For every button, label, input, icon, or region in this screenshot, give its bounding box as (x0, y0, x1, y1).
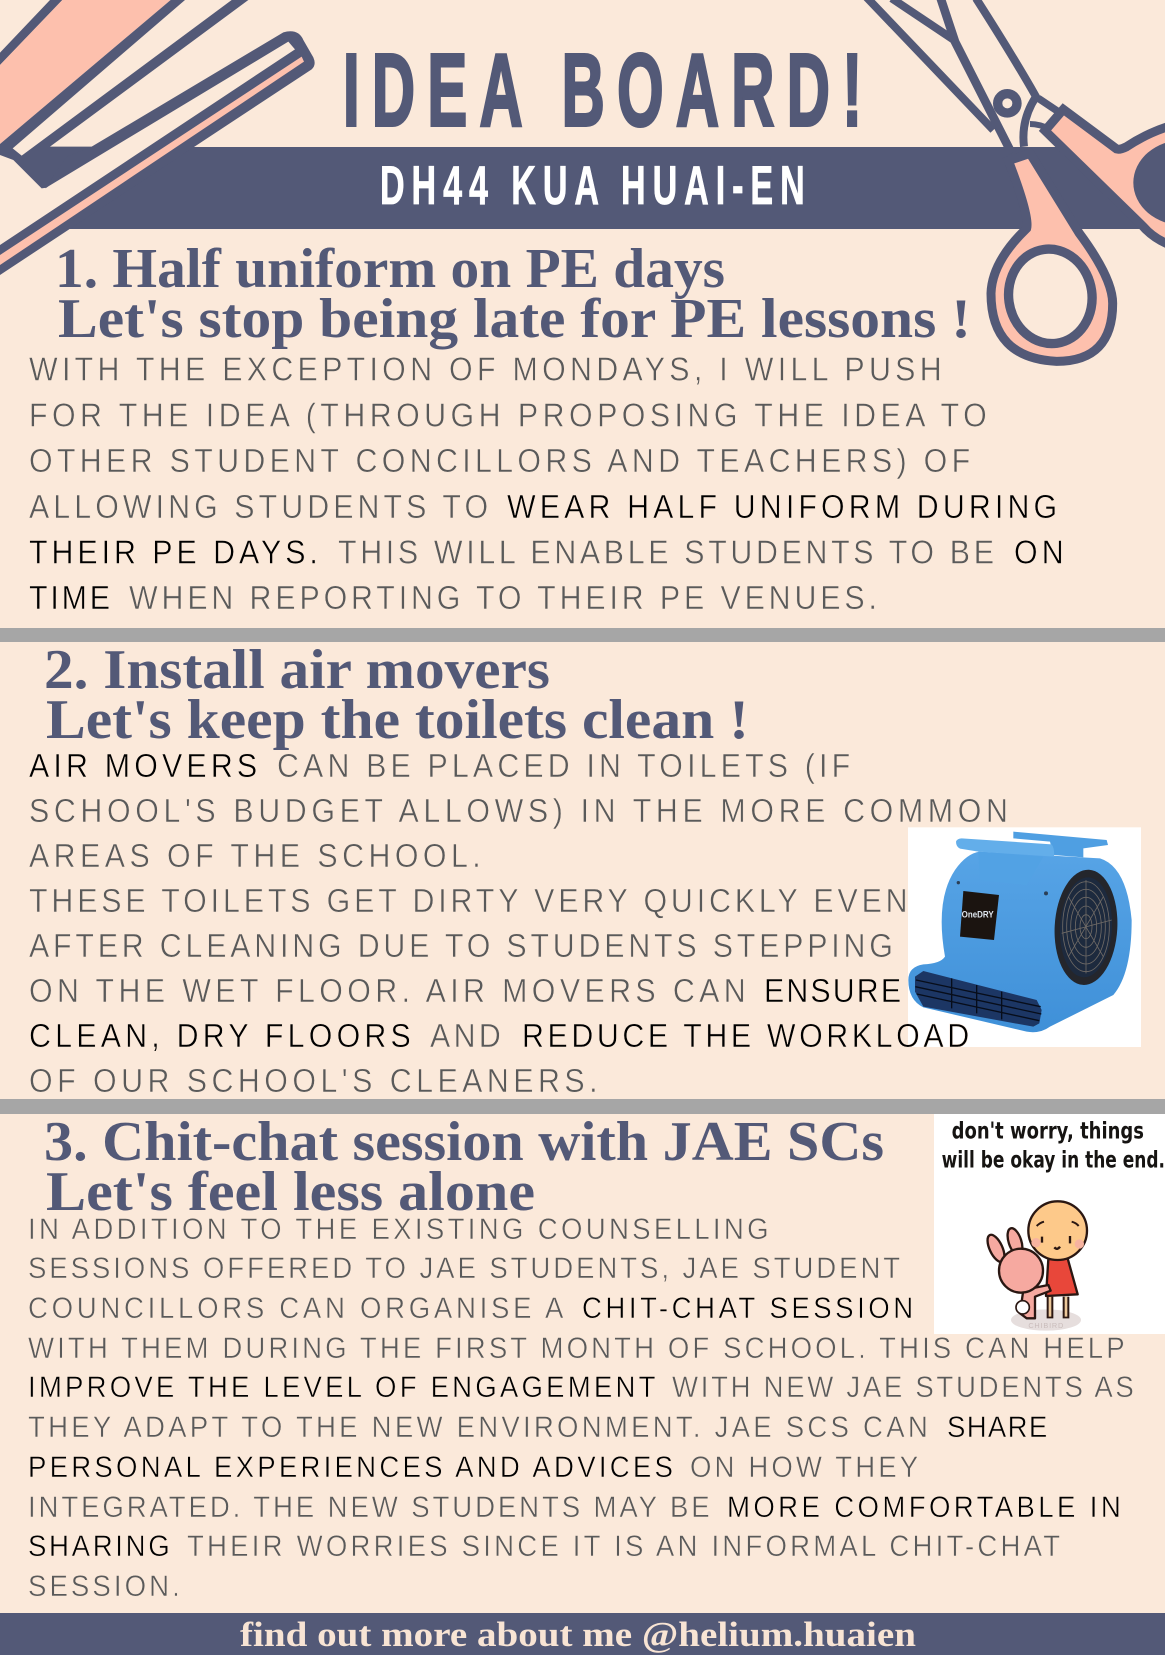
text block: idea 3 body: SESSION. (28, 1570, 180, 1603)
heading: idea 2 (44, 639, 749, 751)
text block: idea 3 body: THEY ADAPT TO THE NEW ENVIRONMENT. JAE SCS CAN (28, 1411, 928, 1444)
text block: idea 2 body: CLEAN, DRY FLOORS (29, 1017, 411, 1054)
divider bar 1 (0, 628, 1165, 642)
heading: idea 3 (44, 1111, 884, 1223)
text block: idea 1 body: WHEN REPORTING TO THEIR PE VENUES. (129, 579, 877, 616)
text block: idea 3 body: SHARING (28, 1530, 170, 1563)
text block: idea 3 body: THEIR WORRIES SINCE IT IS AN INFORMAL CHIT-CHAT (187, 1530, 1060, 1563)
text block: idea 2 body: SCHOOL'S BUDGET ALLOWS) IN THE MORE COMMON (29, 792, 1008, 829)
text block: idea 3 body: IMPROVE THE LEVEL OF ENGAGEMENT (28, 1371, 655, 1404)
text block: idea 3 body: WITH THEM DURING THE FIRST MONTH OF SCHOOL. THIS CAN HELP (28, 1332, 1125, 1365)
image: comic reassurance (934, 1114, 1165, 1334)
text block: idea 1 body: THIS WILL ENABLE STUDENTS TO BE (338, 533, 994, 571)
text block: idea 3 body: IN ADDITION TO THE EXISTING COUNSELLING (28, 1213, 769, 1246)
icon: scissors (866, 0, 1165, 361)
panel: idea 1 (29, 238, 1064, 616)
heading: idea 2: Let's keep the toilets clean ! (46, 689, 749, 751)
subtitle: DH44 KUA HUAI-EN (380, 155, 805, 216)
text block: idea 1 body: OTHER STUDENT CONCILLORS AND TEACHERS) OF (29, 442, 970, 479)
text block: idea 3 body: INTEGRATED. THE NEW STUDENTS MAY BE (28, 1491, 710, 1524)
text block: idea 3 body (28, 1213, 1134, 1603)
text block: idea 2 body: AFTER CLEANING DUE TO STUDENTS STEPPING (29, 927, 893, 964)
image: comic reassurance: CHIBIRD (1028, 1321, 1063, 1330)
text block: idea 2 body: AIR MOVERS (29, 747, 257, 784)
text block: idea 1 body: WEAR HALF UNIFORM DURING (507, 488, 1057, 525)
text block: idea 3 body: MORE COMFORTABLE IN (727, 1491, 1121, 1524)
heading: idea 1 (55, 238, 971, 350)
title: IDEA BOARD! (343, 33, 862, 148)
divider bar 2 (0, 1099, 1165, 1114)
footer (0, 1613, 1165, 1655)
text block: idea 2 body: CAN BE PLACED IN TOILETS (IF (277, 747, 850, 784)
text block: idea 3 body: SHARE (947, 1411, 1047, 1444)
text block: idea 1 body: FOR THE IDEA (THROUGH PROPOSING THE IDEA TO (29, 396, 987, 434)
heading: idea 3: Let's feel less alone (46, 1161, 535, 1223)
heading: idea 1: Let's stop being late for PE lessons ! (58, 288, 971, 350)
heading: idea 1: 1. Half uniform on PE days (55, 238, 725, 300)
text block: idea 2 body: REDUCE THE WORKLOAD (522, 1017, 969, 1054)
image: air mover fan (908, 827, 1141, 1047)
text block: idea 3 body: ON HOW THEY (690, 1451, 918, 1484)
text block: idea 3 body: CHIT-CHAT SESSION (582, 1292, 913, 1325)
text block: idea 2 body: THESE TOILETS GET DIRTY VERY QUICKLY EVEN (29, 882, 908, 919)
panel: idea 3 (28, 1111, 1165, 1603)
text block: idea 3 body: PERSONAL EXPERIENCES AND ADVICES (28, 1451, 673, 1484)
text block: idea 1 body: ALLOWING STUDENTS TO (29, 488, 488, 525)
image: air mover fan: OneDRY (962, 909, 994, 919)
text block: idea 2 body: ON THE WET FLOOR. AIR MOVERS CAN (29, 972, 746, 1009)
text block: idea 3 body: SESSIONS OFFERED TO JAE STUDENTS, JAE STUDENT (28, 1252, 900, 1285)
text block: idea 1 body: ON (1014, 533, 1064, 571)
header band (68, 147, 1165, 229)
text block: idea 2 body: ENSURE (764, 972, 901, 1009)
text block: idea 1 body: THEIR PE DAYS. (29, 533, 318, 571)
panel: idea 2 (29, 639, 1141, 1099)
text block: idea 1 body (29, 350, 1064, 616)
heading: idea 2: 2. Install air movers (44, 639, 550, 701)
text block: idea 2 body: AND (430, 1017, 501, 1054)
icon: hair straightener (0, 0, 315, 275)
text block: idea 2 body: OF OUR SCHOOL'S CLEANERS. (29, 1062, 598, 1099)
text block: idea 1 body: TIME (29, 579, 110, 616)
heading: idea 3: 3. Chit-chat session with JAE SCs (44, 1111, 884, 1173)
text block: idea 1 body: WITH THE EXCEPTION OF MONDAYS, I WILL PUSH (29, 350, 942, 388)
text block: idea 3 body: COUNCILLORS CAN ORGANISE A (28, 1292, 564, 1325)
text block: idea 2 body: AREAS OF THE SCHOOL. (29, 837, 481, 874)
text block: idea 2 body (29, 747, 1008, 1099)
footer: find out more about me @helium.huaien (240, 1615, 916, 1654)
text block: idea 3 body: WITH NEW JAE STUDENTS AS (672, 1371, 1134, 1404)
